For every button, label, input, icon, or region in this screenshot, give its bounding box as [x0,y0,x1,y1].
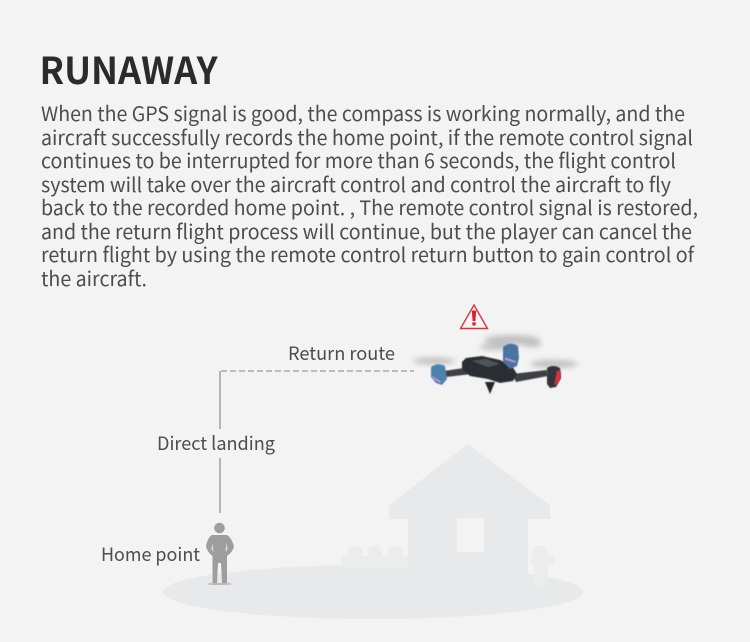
ground ellipse [163,565,583,619]
rear motor accent [505,357,516,363]
icon: warning triangle [460,305,488,328]
body text: the aircraft. [41,263,147,292]
drone [413,335,578,394]
bushes left [342,546,408,567]
body text: system will take over the aircraft control and control the aircraft to fly [41,169,672,198]
label: home point: Home point [101,541,200,567]
bush right [531,546,554,586]
front-left motor blue [431,364,447,385]
drone body [462,356,517,383]
title: RUNAWAY [40,41,218,95]
propeller blur [413,335,578,368]
drone arms [444,356,548,394]
right motor [547,366,561,388]
return route dashed line [221,370,414,372]
body text [41,98,698,292]
direct landing line top [219,371,221,429]
body text: When the GPS signal is good, the compass is working normally, and the [41,98,685,127]
body text: aircraft successfully records the home point, if the remote control signal [41,122,693,151]
label: return route: Return route [288,340,395,366]
body text: return flight by using the remote control return button to gain control of [41,239,695,268]
icon: person [206,523,234,585]
body text: back to the recorded home point. , The remote control signal is restored, [41,192,698,221]
label: direct landing: Direct landing [157,430,276,456]
house window [457,518,484,552]
house silhouette [342,444,554,586]
direct landing line bottom [219,458,221,513]
body text: and the return flight process will continue, but the player can cancel the [41,216,692,245]
rear motor blue [503,344,519,369]
body text: continues to be interrupted for more than 6 seconds, the flight control [41,145,676,174]
right motor accent [554,370,561,386]
left motor accent [432,376,441,383]
